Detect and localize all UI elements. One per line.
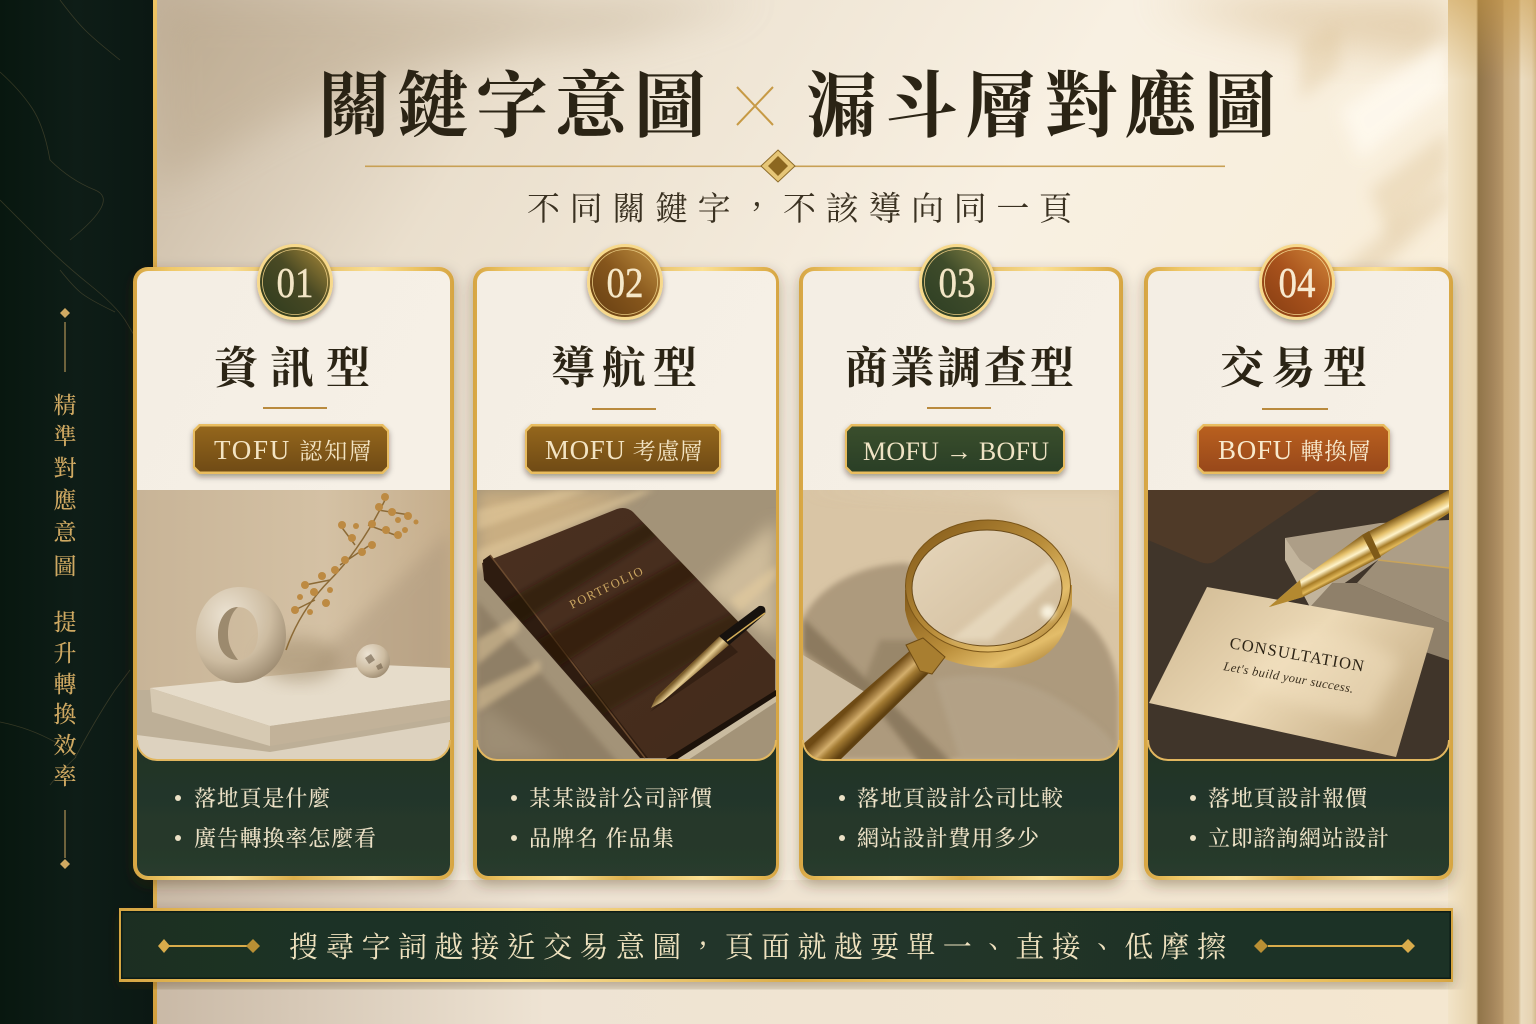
keyword list — [1190, 786, 1389, 851]
title — [318, 67, 1276, 147]
image: consultation card and pen: CONSULTATION — [1228, 633, 1367, 676]
image border — [477, 740, 776, 760]
banner text: 搜尋字詞越接近交易意圖，頁面就越要單一、直接、低摩擦 — [289, 931, 1227, 964]
heading rule — [263, 407, 327, 409]
title cross icon — [737, 87, 773, 125]
number badge 02 — [587, 244, 663, 320]
card frame — [1144, 267, 1453, 880]
subtitle: 不同關鍵字，不該導向同一頁 — [527, 191, 1074, 228]
keyword 2: 立即諮詢網站設計 — [1208, 826, 1389, 851]
right curtain column — [1448, 0, 1536, 1024]
side ornament bottom — [60, 810, 70, 869]
card frame — [799, 267, 1123, 880]
banner frame — [119, 908, 1453, 982]
right ornament — [1254, 939, 1415, 953]
title: 關鍵字意圖 — [318, 67, 706, 147]
keyword 1: 落地頁是什麼 — [194, 786, 330, 811]
number badge 03: 03 — [938, 261, 976, 307]
number badge 02: 02 — [606, 261, 644, 307]
image: marble still life — [137, 490, 450, 760]
card frame — [133, 267, 454, 880]
panel: card 1 informational — [133, 244, 454, 880]
funnel badge — [845, 424, 1065, 474]
heading rule — [1262, 408, 1328, 410]
card heading: 導航型 — [551, 343, 697, 393]
funnel badge: BOFU 轉換層 — [1218, 435, 1371, 465]
number badge 01 — [257, 244, 333, 320]
keyword 1: 某某設計公司評價 — [529, 786, 714, 811]
number badge 03 — [919, 244, 995, 320]
keyword list — [839, 786, 1064, 851]
keyword list — [511, 786, 714, 851]
image: consultation card and pen: Let's build your success. — [1221, 659, 1355, 696]
image: consultation card and pen — [1148, 490, 1449, 760]
panel: card 2 navigational — [473, 244, 779, 880]
keyword 2: 網站設計費用多少 — [857, 826, 1040, 851]
card heading: 交易型 — [1220, 344, 1367, 393]
funnel badge — [193, 424, 389, 474]
side vertical caption — [54, 308, 78, 869]
card heading: 商業調查型 — [844, 344, 1074, 393]
side ornament top — [60, 308, 70, 372]
funnel badge: TOFU 認知層 — [214, 435, 372, 465]
left marble panel — [0, 0, 157, 1024]
funnel badge: MOFU 考慮層 — [545, 435, 703, 465]
heading rule — [592, 408, 656, 410]
left ornament — [158, 939, 260, 953]
heading rule — [927, 407, 991, 409]
funnel badge — [1197, 424, 1390, 474]
keyword 2: 品牌名 作品集 — [529, 826, 674, 851]
funnel badge: MOFU → BOFU — [863, 437, 1049, 466]
title: 漏斗層對應圖 — [806, 67, 1276, 147]
card heading: 資訊型 — [214, 344, 370, 393]
keyword 1: 落地頁設計公司比較 — [857, 786, 1064, 811]
image border — [1148, 740, 1449, 760]
number badge 04 — [1259, 244, 1335, 320]
image border — [803, 740, 1119, 760]
number badge 01: 01 — [276, 261, 314, 307]
panel: card 3 commercial investigation — [799, 244, 1123, 880]
side text: 精準對應意圖提升轉換效率 — [54, 393, 78, 789]
keyword 1: 落地頁設計報價 — [1208, 786, 1369, 811]
title divider — [365, 150, 1225, 182]
bottom banner — [119, 908, 1453, 982]
image border — [137, 740, 450, 760]
funnel badge — [525, 424, 721, 474]
keyword 2: 廣告轉換率怎麼看 — [194, 826, 376, 851]
panel: card 4 transactional — [1144, 244, 1453, 880]
keyword list — [175, 786, 376, 851]
image: portfolio book: PORTFOLIO — [567, 563, 647, 612]
card frame — [473, 267, 779, 880]
image: magnifying glass — [802, 490, 1119, 770]
image: portfolio book — [477, 490, 776, 759]
number badge 04: 04 — [1278, 261, 1316, 307]
